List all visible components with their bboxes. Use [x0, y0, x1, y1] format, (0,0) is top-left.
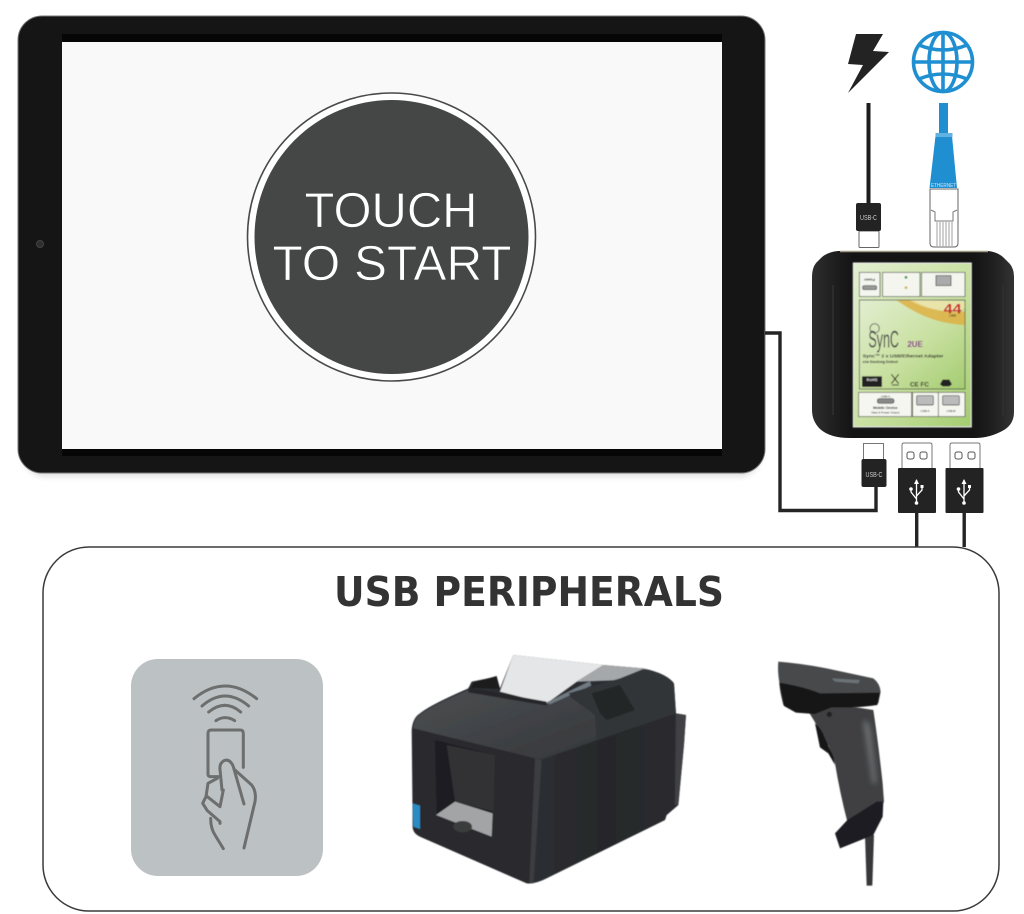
- adapter label: CE FC: [910, 382, 929, 389]
- icon: power lightning bolt: [848, 34, 889, 93]
- printer cover: [413, 690, 597, 759]
- adapter label: SynC: [868, 327, 899, 354]
- adapter label: [853, 263, 971, 427]
- heading: usb peripherals: USB PERIPHERALS: [334, 568, 724, 616]
- adapter label: Data & Power Output: [871, 410, 900, 414]
- ethernet cable: [930, 103, 958, 247]
- icon: contactless card in hand: [194, 686, 257, 849]
- touch to start button: TO START: [272, 236, 512, 291]
- adapter label: 2UE: [907, 340, 924, 349]
- adapter label: Power: [863, 277, 875, 281]
- adapter label: USB-C: [881, 395, 891, 399]
- printer side: [531, 713, 678, 883]
- label logo: 44: [944, 301, 962, 317]
- nfc card reader: [131, 659, 323, 876]
- adapter label: USB-A: [920, 409, 930, 413]
- usb-c power cable: [856, 103, 881, 248]
- panel: usb peripherals: [43, 547, 999, 911]
- usb-a connector 1: [898, 443, 936, 547]
- receipt printer: [412, 655, 686, 883]
- ethernet cable: ETHERNET: [931, 183, 956, 189]
- tablet camera: [36, 240, 44, 248]
- usb-a connector 2: [946, 443, 984, 547]
- tablet: [18, 16, 765, 477]
- adapter label: c/w Docking Detect: [863, 360, 898, 364]
- adapter label: RoHS: [867, 377, 878, 382]
- label top ports: [859, 272, 965, 297]
- label bottom ports: [859, 392, 965, 417]
- touch to start button: [248, 93, 536, 381]
- label main panel: [859, 300, 965, 389]
- usb-c power cable: USB-C: [860, 215, 877, 222]
- adapter label: USB-B: [946, 409, 956, 413]
- paper: [500, 655, 603, 703]
- printer front: [413, 728, 535, 883]
- tablet to adapter usb-c cable: USB-C: [866, 472, 882, 479]
- tablet screen: [62, 42, 722, 449]
- tablet to adapter usb-c cable: [765, 333, 886, 510]
- adapter label: Mobile Device: [873, 406, 898, 410]
- adapter label: Sync™ 2 x USB/Ethernet Adapter: [863, 353, 943, 359]
- touch to start button: TOUCH: [304, 183, 478, 238]
- adapter label: LAVA: [949, 313, 956, 317]
- barcode scanner: [778, 662, 884, 886]
- sync 2ue adapter: [812, 251, 1014, 438]
- icon: globe: [914, 32, 972, 92]
